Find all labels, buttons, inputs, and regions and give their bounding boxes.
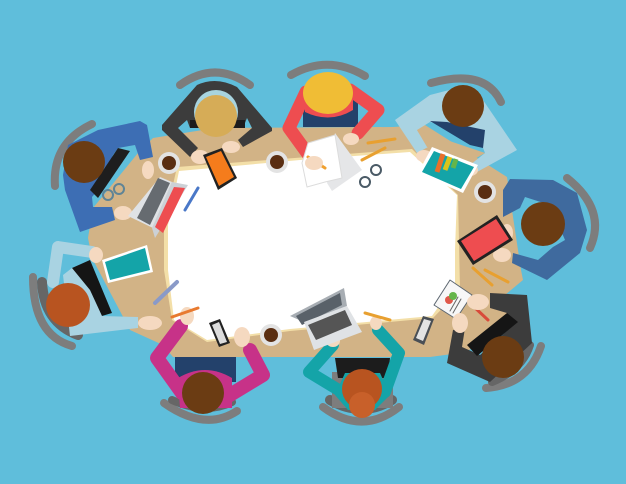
pens and pencils [155,139,508,320]
phone: bottom left [209,319,230,347]
person: blue suit right [493,179,587,280]
tablet: teal left [102,245,153,283]
hands [114,206,132,220]
person: light blue top right [395,85,517,176]
notebook with chart [434,280,472,319]
hands [343,133,359,145]
hands [89,247,103,263]
head [442,85,484,127]
person: red top [289,72,378,157]
glasses: table [360,165,381,187]
person: teal bottom [309,316,399,418]
head [194,90,238,134]
head [342,369,382,409]
phone: bottom right [413,316,434,345]
head [182,372,224,414]
head [303,72,353,114]
person: dark suit bottom right [447,293,532,382]
head [46,283,90,327]
table top [88,125,523,357]
person: magenta bottom [157,307,263,414]
glasses: left [103,184,124,200]
tablet: orange [203,148,237,190]
table paper edge [164,149,460,342]
head [63,141,105,183]
white sheet on table [168,152,457,340]
person: light blue left [46,247,162,336]
coffee cups [158,151,496,346]
hands [180,307,194,325]
hands [326,335,340,347]
papers [302,133,362,191]
tablet: teal chart [418,147,478,193]
hands: bottom right person [452,294,489,333]
person: dark suit top [162,81,272,164]
chairs [33,65,595,421]
hands [191,150,209,164]
tablet: red [457,215,513,265]
laptop: top left [128,177,188,238]
hands [416,150,432,162]
person: blue suit top left [63,121,154,232]
hands [493,248,511,262]
laptop: bottom center [290,288,362,350]
head [482,336,524,378]
head [521,202,565,246]
